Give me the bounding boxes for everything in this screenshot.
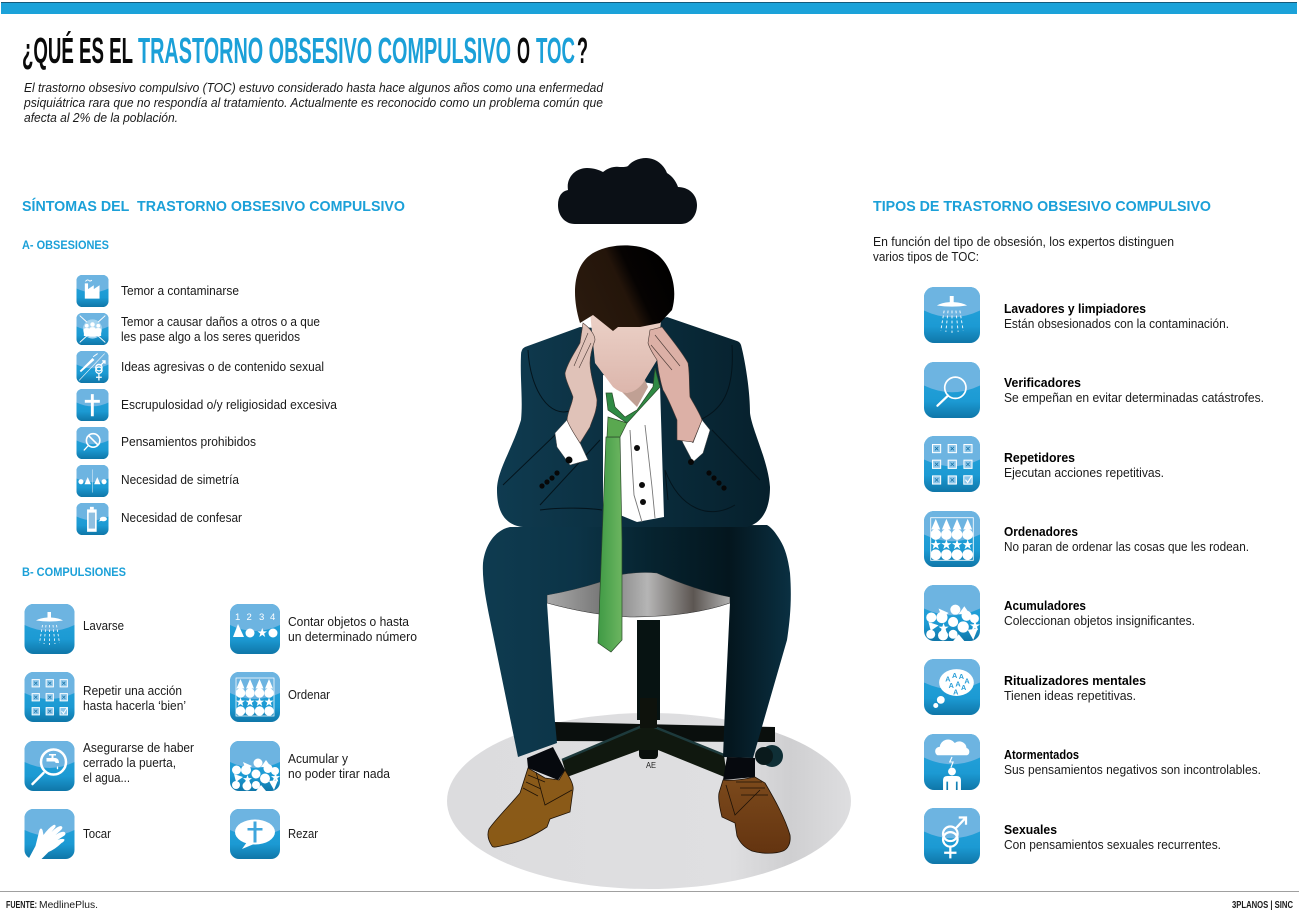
hands [565,323,702,443]
item: confesar: Necesidad de confesar [121,511,242,525]
item: temor a contaminarse: Temor a contaminarse [121,284,239,298]
type: acumuladores: Coleccionan objetos insignificantes. [1004,614,1195,628]
item: asegurarse [24,741,194,791]
item: pensamientos prohibidos: Pensamientos prohibidos [121,435,256,449]
item: repetir: Repetir una acción [83,684,182,698]
type: atormentados: Atormentados [1004,748,1079,762]
jacket [497,317,770,527]
face [590,312,662,393]
item: confesar [76,503,242,535]
sleeve buttons [539,456,727,491]
type: repetidores: Repetidores [1004,451,1075,465]
intro text: psiquiátrica rara que no respondía al tratamiento. Actualmente es reconocido como un problema común que [23,96,603,110]
title: ¿QUÉ ES EL [22,30,133,71]
type: acumuladores [924,585,1195,641]
heading: tipos: TIPOS DE TRASTORNO OBSESIVO COMPULSIVO [873,198,1211,215]
item: acumular: Acumular y [288,752,349,766]
tipos intro: varios tipos de TOC: [873,250,979,264]
item: contar [230,604,417,654]
item: repetir: hasta hacerla ‘bien’ [83,699,186,713]
shirt buttons [634,445,646,505]
type: ritualizadores: Ritualizadores mentales [1004,674,1146,688]
type: ritualizadores: Tienen ideas repetitivas. [1004,689,1136,703]
intro text [23,81,604,125]
trousers [483,525,791,758]
item: contar: un determinado número [288,630,417,644]
panel: síntomas [22,198,417,859]
item: tocar: Tocar [83,827,111,841]
item: rezar [230,809,318,859]
tipos intro [873,235,1174,264]
shoes [488,768,790,853]
item: escrupulosidad: Escrupulosidad o/y religiosidad excesiva [121,398,337,412]
item: asegurarse: cerrado la puerta, [83,756,176,770]
socks [527,747,755,780]
type: ordenadores [924,511,1249,567]
footer [0,891,1299,911]
jacket seams [503,345,760,512]
item: temor a contaminarse [76,275,239,307]
item: temor a causar daños [76,313,320,345]
type: atormentados: Sus pensamientos negativos son incontrolables. [1004,763,1261,777]
type: ordenadores: No paran de ordenar las cosas que les rodean. [1004,540,1249,554]
item: repetir [24,672,186,722]
item: ideas agresivas [76,351,324,383]
type: lavadores: Lavadores y limpiadores [1004,302,1146,316]
item: acumular: no poder tirar nada [288,767,390,781]
item: asegurarse: Asegurarse de haber [83,741,194,755]
signature: AE [646,761,656,770]
office chair [547,572,783,778]
item: asegurarse: el agua... [83,771,130,785]
item: simetría [76,465,239,497]
subheading: obsesiones: A- OBSESIONES [22,240,109,252]
item: ordenar: Ordenar [288,688,330,702]
title: TOC [536,30,575,71]
item: temor a causar daños: les pase algo a los seres queridos [121,330,300,344]
item: lavarse [24,604,124,654]
illustration: cloud [558,158,697,224]
item: escrupulosidad [76,389,337,421]
shirt [603,375,664,522]
type: acumuladores: Acumuladores [1004,599,1086,613]
title [22,30,588,71]
type: lavadores [924,287,1229,343]
source [6,900,98,911]
type: repetidores [924,436,1164,492]
item: ideas agresivas: Ideas agresivas o de contenido sexual [121,360,324,374]
type: verificadores: Se empeñan en evitar determinadas catástrofes. [1004,391,1264,405]
type: lavadores: Están obsesionados con la contaminación. [1004,317,1229,331]
title: O [517,30,530,71]
illustration: seated man [447,245,851,889]
source: FUENTE: [6,900,37,911]
panel: tipos [873,198,1264,864]
intro text: afecta al 2% de la población. [24,111,178,125]
title: TRASTORNO OBSESIVO COMPULSIVO [138,30,511,71]
type: repetidores: Ejecutan acciones repetitivas. [1004,466,1164,480]
type: sexuales: Sexuales [1004,823,1057,837]
item: contar: Contar objetos o hasta [288,615,409,629]
item: ordenar [230,672,330,722]
type: verificadores [924,362,1264,418]
subheading: compulsiones: B- COMPULSIONES [22,567,126,579]
top bar [1,2,1297,14]
tie [598,368,660,652]
item: tocar [24,809,111,859]
type: sexuales [924,808,1221,864]
item: temor a causar daños: Temor a causar daños a otros o a que [121,315,320,329]
title: ? [577,30,588,71]
item: rezar: Rezar [288,827,318,841]
tipos intro: En función del tipo de obsesión, los expertos distinguen [873,235,1174,249]
type: sexuales: Con pensamientos sexuales recurrentes. [1004,838,1221,852]
item: lavarse: Lavarse [83,619,124,633]
type: verificadores: Verificadores [1004,376,1081,390]
hair [575,245,674,331]
item: simetría: Necesidad de simetría [121,473,239,487]
item: acumular [230,741,390,791]
type: ritualizadores [924,659,1146,715]
type: ordenadores: Ordenadores [1004,525,1078,539]
floor shadow [447,713,851,889]
type: atormentados [924,734,1261,790]
source: MedlinePlus. [39,900,98,911]
cuffs [555,420,710,465]
item: pensamientos prohibidos [76,427,256,459]
intro text: El trastorno obsesivo compulsivo (TOC) estuvo considerado hasta hace algunos años como una enfermedad [24,81,604,95]
heading: síntomas: SÍNTOMAS DEL TRASTORNO OBSESIVO COMPULSIVO [22,198,405,215]
neck [615,380,648,407]
